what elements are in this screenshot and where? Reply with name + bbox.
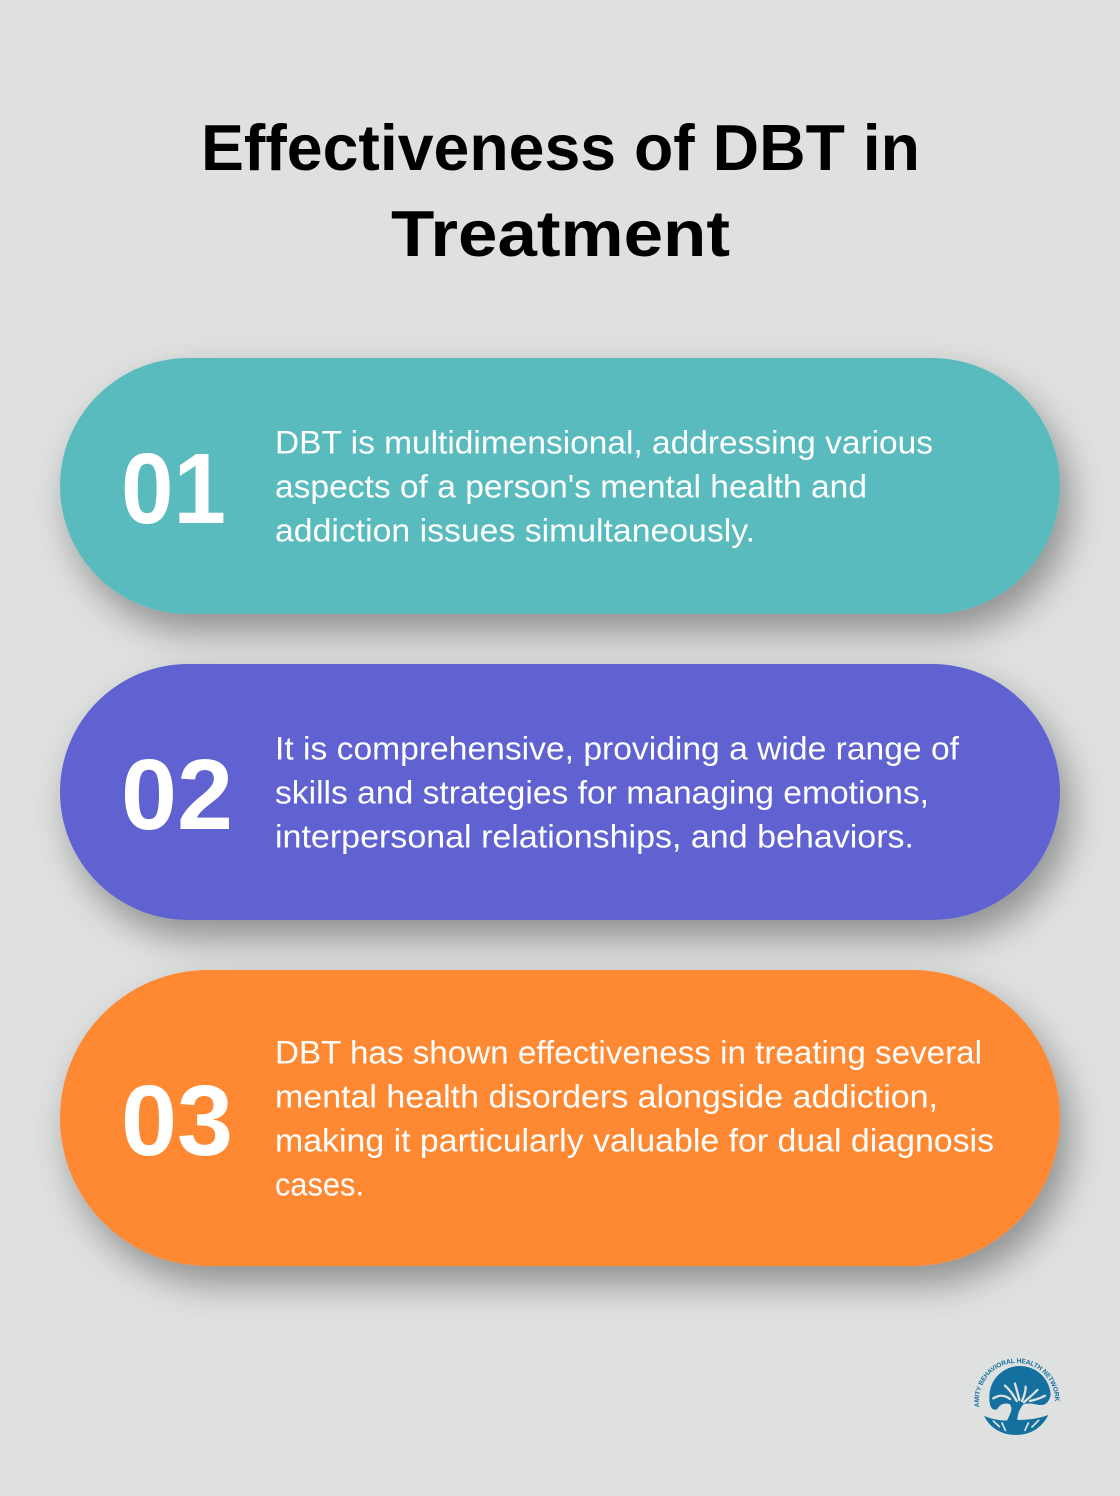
step 02 description: It is comprehensive, providing a wide range of — [275, 730, 959, 766]
step 03 description: DBT has shown effectiveness in treating several — [275, 1034, 982, 1070]
title: Treatment — [391, 197, 730, 270]
step 02 description: interpersonal relationships, and behaviors. — [275, 818, 914, 854]
step 03 description — [275, 1034, 994, 1202]
step 01 description: aspects of a person's mental health and — [275, 468, 867, 504]
panel: step 02 — [60, 664, 1060, 920]
step 03 description: making it particularly valuable for dual diagnosis — [275, 1122, 994, 1158]
step 03 description: mental health disorders alongside addiction, — [275, 1078, 938, 1114]
step 03 description: cases. — [275, 1166, 364, 1202]
orange pill background — [60, 970, 1060, 1266]
logo: Amity Behavioral Health Network — [974, 1358, 1060, 1435]
title: Effectiveness of DBT in — [201, 111, 920, 184]
panel: step 01 — [60, 358, 1060, 614]
purple pill background — [60, 664, 1060, 920]
step 02 description — [275, 730, 959, 854]
logo arc text: AMITY BEHAVIORAL HEALTH NETWORK — [974, 1358, 1060, 1407]
step 01 description: addiction issues simultaneously. — [275, 512, 755, 548]
title — [201, 111, 920, 270]
number 01: 01 — [121, 433, 226, 545]
step 01 description: DBT is multidimensional, addressing various — [275, 424, 933, 460]
logo tree — [984, 1366, 1051, 1435]
teal pill background — [60, 358, 1060, 614]
panel: step 03 — [60, 970, 1060, 1266]
number 02: 02 — [121, 739, 233, 851]
number 03: 03 — [121, 1065, 233, 1177]
step 02 description: skills and strategies for managing emotions, — [275, 774, 929, 810]
step 01 description — [275, 424, 933, 548]
